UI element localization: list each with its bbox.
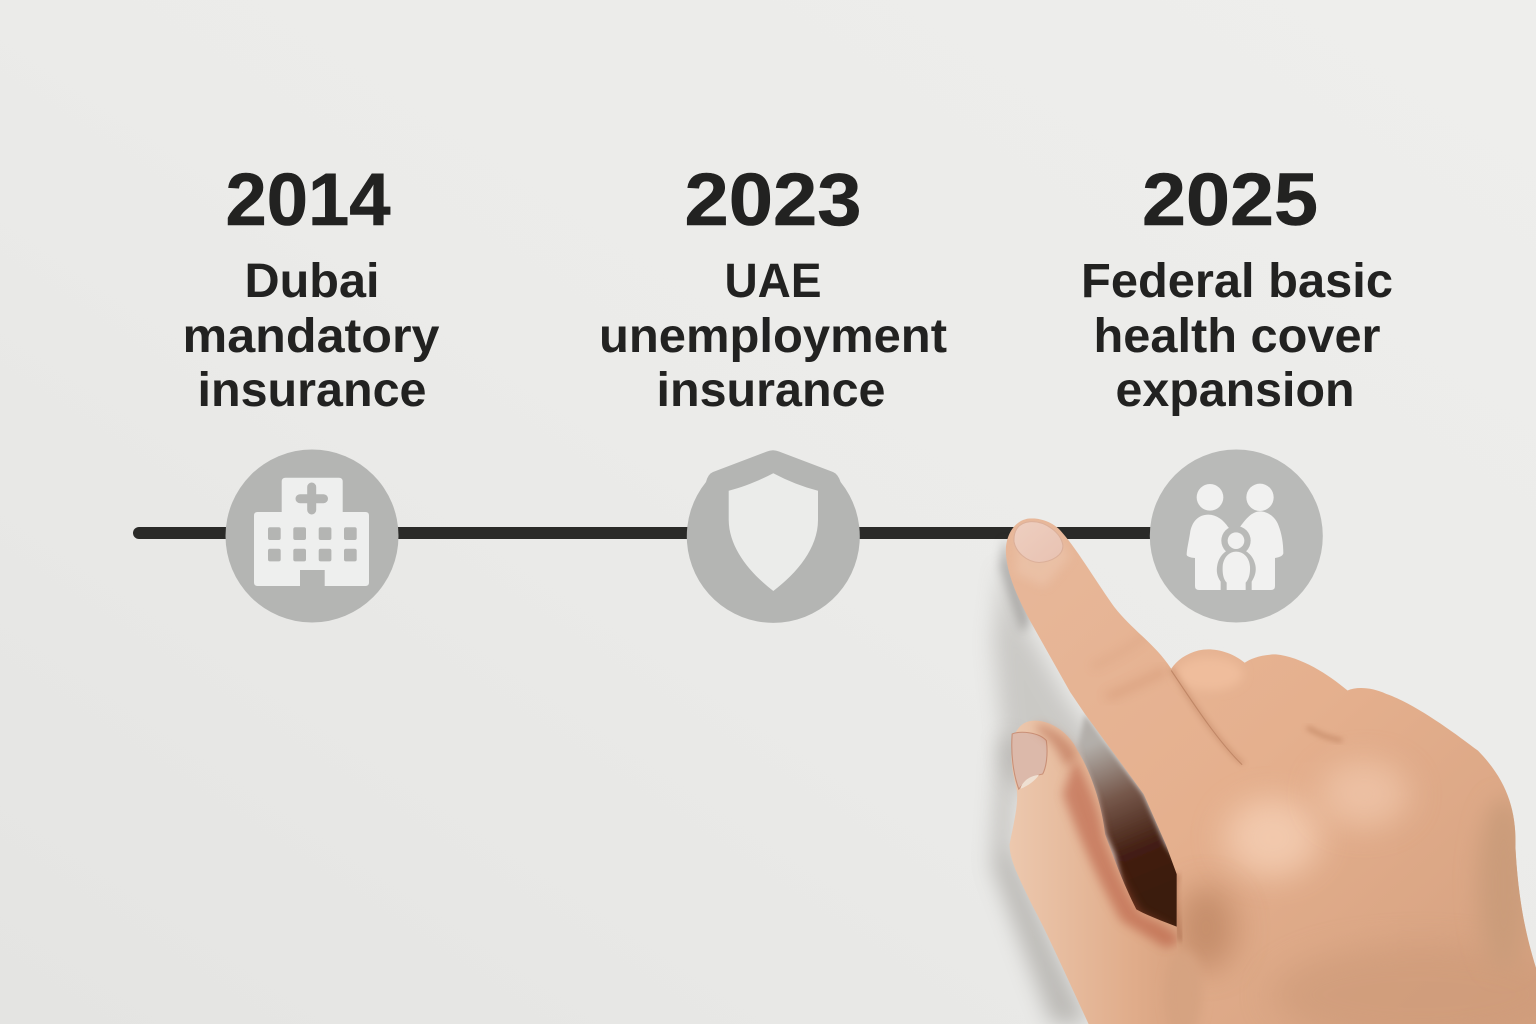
timeline line [139, 527, 1160, 539]
label: Federal basic health cover expansion: expansion [1116, 364, 1354, 417]
label: Dubai mandatory insurance: insurance [198, 364, 426, 417]
label: Federal basic health cover expansion [1081, 255, 1393, 417]
label: Federal basic health cover expansion: Federal basic [1081, 255, 1393, 308]
label: Dubai mandatory insurance: mandatory [182, 310, 440, 363]
label: UAE unemployment insurance: insurance [656, 364, 886, 417]
label: Federal basic health cover expansion: health cover [1094, 310, 1380, 363]
year 2023: 2023 [684, 158, 862, 241]
milestone 2023 [599, 158, 947, 623]
icon: hospital [226, 450, 398, 622]
year 2014: 2014 [226, 158, 390, 241]
label: Dubai mandatory insurance [182, 255, 440, 417]
year 2025: 2025 [1142, 158, 1318, 241]
label: Dubai mandatory insurance: Dubai [244, 255, 380, 308]
hand pointing at the timeline [960, 500, 1536, 1024]
fingernail [1014, 522, 1063, 562]
icon: family [1150, 450, 1323, 622]
shadow gap between thumb and finger [1078, 714, 1195, 961]
hand and index finger [1006, 518, 1536, 1024]
label: UAE unemployment insurance: unemployment [599, 310, 947, 363]
milestone 2014 [182, 158, 440, 622]
label: UAE unemployment insurance: UAE [724, 255, 822, 308]
label: UAE unemployment insurance [599, 255, 947, 417]
icon: shield [687, 450, 860, 623]
hand shadow on the surface [993, 537, 1111, 1024]
thumb [1010, 721, 1217, 1024]
milestone 2025 [1081, 158, 1393, 622]
